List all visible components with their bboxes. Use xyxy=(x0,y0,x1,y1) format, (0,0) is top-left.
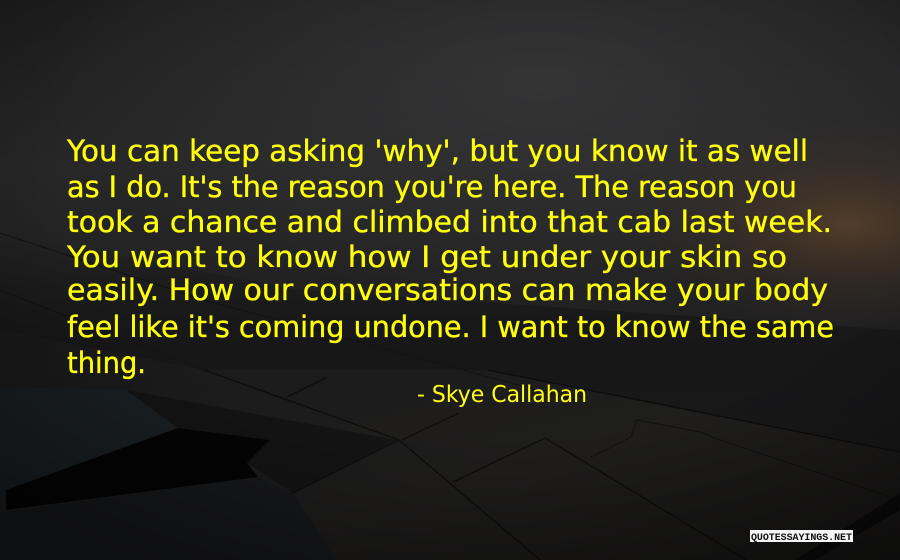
quote text: as I do. It's the reason you're here. The reason you xyxy=(67,170,797,204)
quote attribution: - Skye Callahan xyxy=(417,382,587,408)
quote text: thing. xyxy=(67,346,146,380)
background: sky highlight xyxy=(0,0,900,400)
quote text: easily. How our conversations can make your body xyxy=(67,273,828,307)
background: aircraft wing xyxy=(0,233,900,560)
quote text xyxy=(66,134,834,380)
quote text: You can keep asking 'why', but you know it as well xyxy=(66,134,808,168)
quote text: took a chance and climbed into that cab last week. xyxy=(67,205,832,239)
quote text: feel like it's coming undone. I want to know the same xyxy=(67,310,834,344)
quote text: You want to know how I get under your skin so xyxy=(66,240,787,274)
background: sunset glow xyxy=(620,115,900,335)
watermark: QUOTESSAYINGS.NET xyxy=(751,533,852,544)
